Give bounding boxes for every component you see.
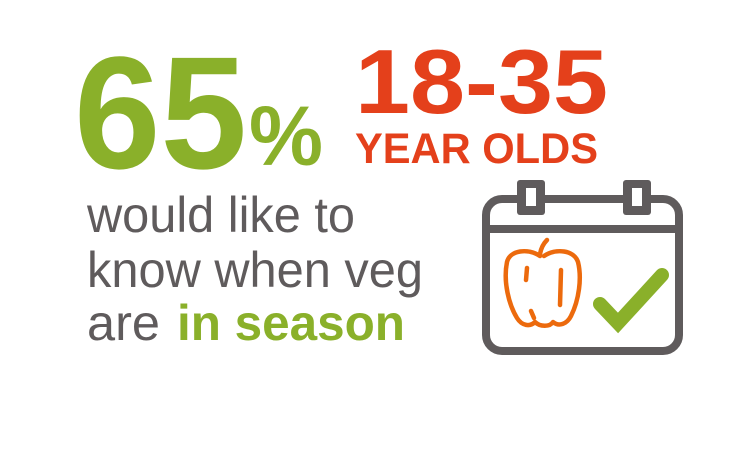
body text xyxy=(86,187,423,351)
body text: are xyxy=(87,295,160,351)
headline: 65%: % xyxy=(249,89,323,183)
icon: pepper xyxy=(506,240,580,326)
headline: 18-35 year olds: YEAR OLDS xyxy=(355,125,598,173)
headline: 18-35 year olds: 18-35 xyxy=(355,32,608,133)
icon: calendar with pepper and check xyxy=(486,180,679,351)
headline: 18-35 year olds xyxy=(355,32,608,173)
body text: know when veg xyxy=(87,242,423,298)
body text: in season xyxy=(177,295,405,351)
headline: 65%: 65 xyxy=(74,23,247,202)
body text: would like to xyxy=(86,187,355,243)
icon: check mark xyxy=(600,275,662,323)
